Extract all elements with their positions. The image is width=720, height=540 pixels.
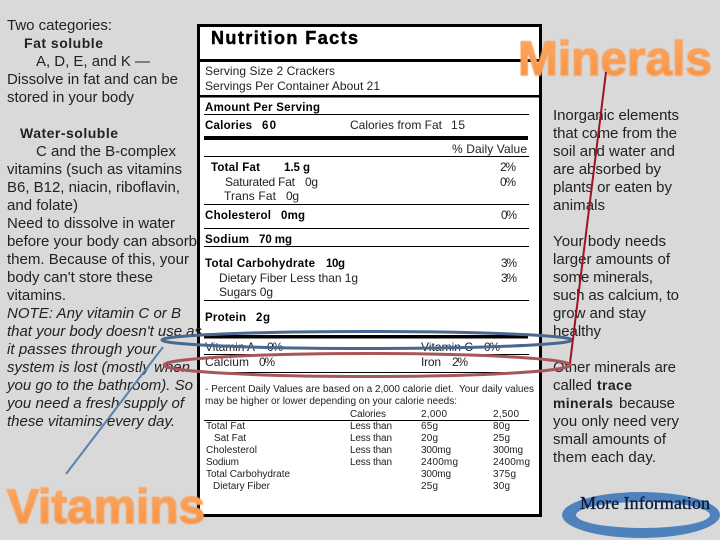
text: nutrient rows: 2g [256, 312, 270, 324]
table: daily value reference: 2400mg [493, 457, 530, 468]
text: daily values footnote: - Percent Daily Values are based on a 2,000 calorie diet. Your daily values [205, 384, 534, 395]
text block: vitamins description: Dissolve in fat and can be [7, 71, 178, 88]
text: nutrient rows: Saturated Fat [225, 175, 296, 189]
text block: minerals description: animals [553, 197, 605, 214]
text: vitamins and minerals rows: 0% [267, 340, 283, 354]
text: serving information: Servings Per Container About 21 [205, 79, 380, 93]
text: calories: Calories [205, 120, 252, 132]
table: daily value reference: 2,500 [493, 409, 519, 420]
text: nutrient rows: Trans Fat [224, 189, 277, 203]
text block: vitamins description: B6, B12, niacin, riboflavin, [7, 179, 180, 196]
text: nutrient rows: Cholesterol [205, 210, 271, 222]
text block: minerals description: soil and water and [553, 143, 675, 160]
text block: vitamins description: Water-soluble [20, 125, 118, 141]
text: nutrient rows: Sodium [205, 234, 249, 246]
text block: vitamins description: Two categories: [7, 17, 112, 34]
table: daily value reference: Less than [350, 445, 392, 456]
table: daily value reference: 375g [493, 469, 516, 480]
text block: minerals description: small amounts of [553, 431, 667, 448]
text: nutrient rows: Total Fat [211, 162, 260, 174]
table: daily value reference: Sodium [206, 457, 239, 468]
arrow: vitamins connector [66, 347, 163, 474]
table: daily value reference: 30g [493, 481, 510, 492]
text block: vitamins description: C and the B-complex [36, 143, 176, 160]
text block: vitamins description: you go to the bathroom). So [6, 377, 193, 394]
button: more information: More Information [580, 493, 710, 513]
text block: vitamins description: Need to dissolve in water [7, 215, 175, 232]
table: daily value reference: Cholesterol [206, 445, 257, 456]
table: daily value reference: Total Carbohydrate [206, 469, 290, 480]
text: daily values footnote: may be higher or lower depending on your calorie needs: [205, 396, 457, 407]
table: daily value reference: Total Fat [206, 421, 245, 432]
table: daily value reference: 25g [421, 481, 438, 492]
table: daily value reference: 300mg [421, 469, 451, 480]
text: vitamins and minerals rows: 0% [259, 355, 275, 369]
text: vitamins and minerals rows: 0% [484, 340, 500, 354]
text block: minerals description: called [553, 377, 592, 394]
text: nutrient rows: 0% [501, 208, 517, 222]
text: vitamins and minerals rows: Vitamin A [205, 340, 255, 354]
text block: vitamins description: and folate) [7, 197, 78, 214]
text block: vitamins description: Fat soluble [24, 35, 103, 51]
text block: vitamins description: A, D, E, and K — [36, 53, 150, 70]
table: daily value reference: 65g [421, 421, 438, 432]
text: vitamins and minerals rows [205, 340, 500, 369]
table: daily value reference: 80g [493, 421, 510, 432]
table: daily value reference: 25g [493, 433, 510, 444]
text: nutrient rows: 1.5 g [284, 162, 310, 174]
table: daily value reference: 2400mg [421, 457, 458, 468]
text: nutrient rows: 3% [501, 271, 517, 285]
text block: vitamins description: before your body can absorb [7, 233, 197, 250]
text block: minerals description: are absorbed by [553, 161, 662, 178]
text: vitamins and minerals rows: 2% [452, 355, 468, 369]
text block: minerals description: Other minerals are [553, 359, 676, 376]
text: calories [205, 102, 527, 156]
table: daily value reference: Dietary Fiber [213, 481, 271, 492]
text block: minerals description: that come from the [553, 125, 677, 142]
text block: vitamins description: that your body doesn't use as [7, 323, 202, 340]
text: nutrient rows: 70 mg [259, 234, 292, 246]
text block: minerals description: plants or eaten by [553, 179, 672, 196]
text: calories: 15 [451, 118, 465, 132]
button: more information [562, 492, 720, 538]
text block: vitamins description: you need a fresh supply of [6, 395, 186, 412]
text: nutrient rows: 3% [501, 256, 517, 270]
table: daily value reference: Less than [350, 421, 392, 432]
table: daily value reference: 300mg [493, 445, 523, 456]
text block: minerals description: because [619, 395, 675, 412]
text: serving information: Serving Size 2 Crackers [205, 64, 335, 78]
table: daily value reference: Calories [350, 409, 386, 420]
text: nutrient rows: 2% [500, 160, 516, 174]
text: calories: Calories from Fat [350, 118, 443, 132]
text block: minerals description: trace [597, 377, 632, 393]
text block: minerals description: Inorganic elements [553, 107, 679, 124]
text block: vitamins description [6, 17, 202, 430]
text block: minerals description: some minerals, [553, 269, 653, 286]
text: nutrient rows: 0% [500, 175, 516, 189]
text block: vitamins description: NOTE: Any vitamin C or B [7, 305, 181, 322]
text: nutrient rows: Sugars 0g [219, 285, 273, 299]
table: daily value reference: Less than [350, 433, 392, 444]
text: nutrient rows: Dietary Fiber Less than 1g [219, 271, 358, 285]
text: serving information [205, 64, 380, 93]
text block: minerals description [553, 107, 680, 466]
heading: Vitamins: Vitamins [7, 481, 205, 534]
text block: minerals description: Your body needs [553, 233, 666, 250]
highlight: minerals row ellipse [164, 354, 570, 376]
text block: vitamins description: stored in your body [7, 89, 134, 106]
text block: minerals description: healthy [553, 323, 602, 340]
arrow: minerals connector [570, 72, 606, 363]
text: calories: Amount Per Serving [205, 102, 320, 114]
text: daily values footnote [205, 384, 534, 407]
text block: minerals description: such as calcium, to [553, 287, 679, 304]
text block: vitamins description: body can't store these [7, 269, 153, 286]
table: daily value reference: Less than [350, 457, 392, 468]
text: nutrient rows: 0g [286, 189, 299, 203]
text: vitamins and minerals rows: Calcium [205, 355, 249, 369]
text block: vitamins description: vitamins. [7, 287, 66, 304]
text block: minerals description: larger amounts of [553, 251, 671, 268]
text block: vitamins description: these vitamins every day. [7, 413, 175, 430]
text block: vitamins description: them. Because of this, your [7, 251, 189, 268]
text: vitamins and minerals rows: Vitamin C [421, 340, 473, 354]
text block: vitamins description: vitamins (such as vitamins [7, 161, 182, 178]
text: nutrient rows: Protein [205, 312, 246, 324]
text block: minerals description: minerals [553, 395, 613, 411]
text block: minerals description: them each day. [553, 449, 656, 466]
table: daily value reference: 2,000 [421, 409, 447, 420]
highlight: vitamins row ellipse [162, 332, 572, 348]
text: nutrient rows: 0g [305, 175, 318, 189]
heading: Minerals: Minerals [518, 33, 712, 86]
text: calories: % Daily Value [452, 142, 527, 156]
text: vitamins and minerals rows: Iron [421, 355, 441, 369]
text: nutrient rows: Total Carbohydrate [205, 258, 315, 270]
text: nutrient rows [205, 160, 517, 324]
table: daily value reference: Sat Fat [214, 433, 246, 444]
table: daily value reference: 20g [421, 433, 438, 444]
table: daily value reference: 300mg [421, 445, 451, 456]
text: nutrient rows: 10g [326, 258, 345, 270]
text block: vitamins description: system is lost (mostly when [7, 359, 190, 376]
text: nutrient rows: 0mg [281, 210, 305, 222]
text block: minerals description: you only need very [553, 413, 680, 430]
panel: nutrition facts label [198, 26, 540, 516]
text block: vitamins description: it passes through your [7, 341, 157, 358]
text block: minerals description: grow and stay [553, 305, 646, 322]
heading: nutrition facts: Nutrition Facts [211, 28, 358, 48]
text: calories: 60 [262, 120, 276, 132]
table: daily value reference [206, 409, 530, 492]
